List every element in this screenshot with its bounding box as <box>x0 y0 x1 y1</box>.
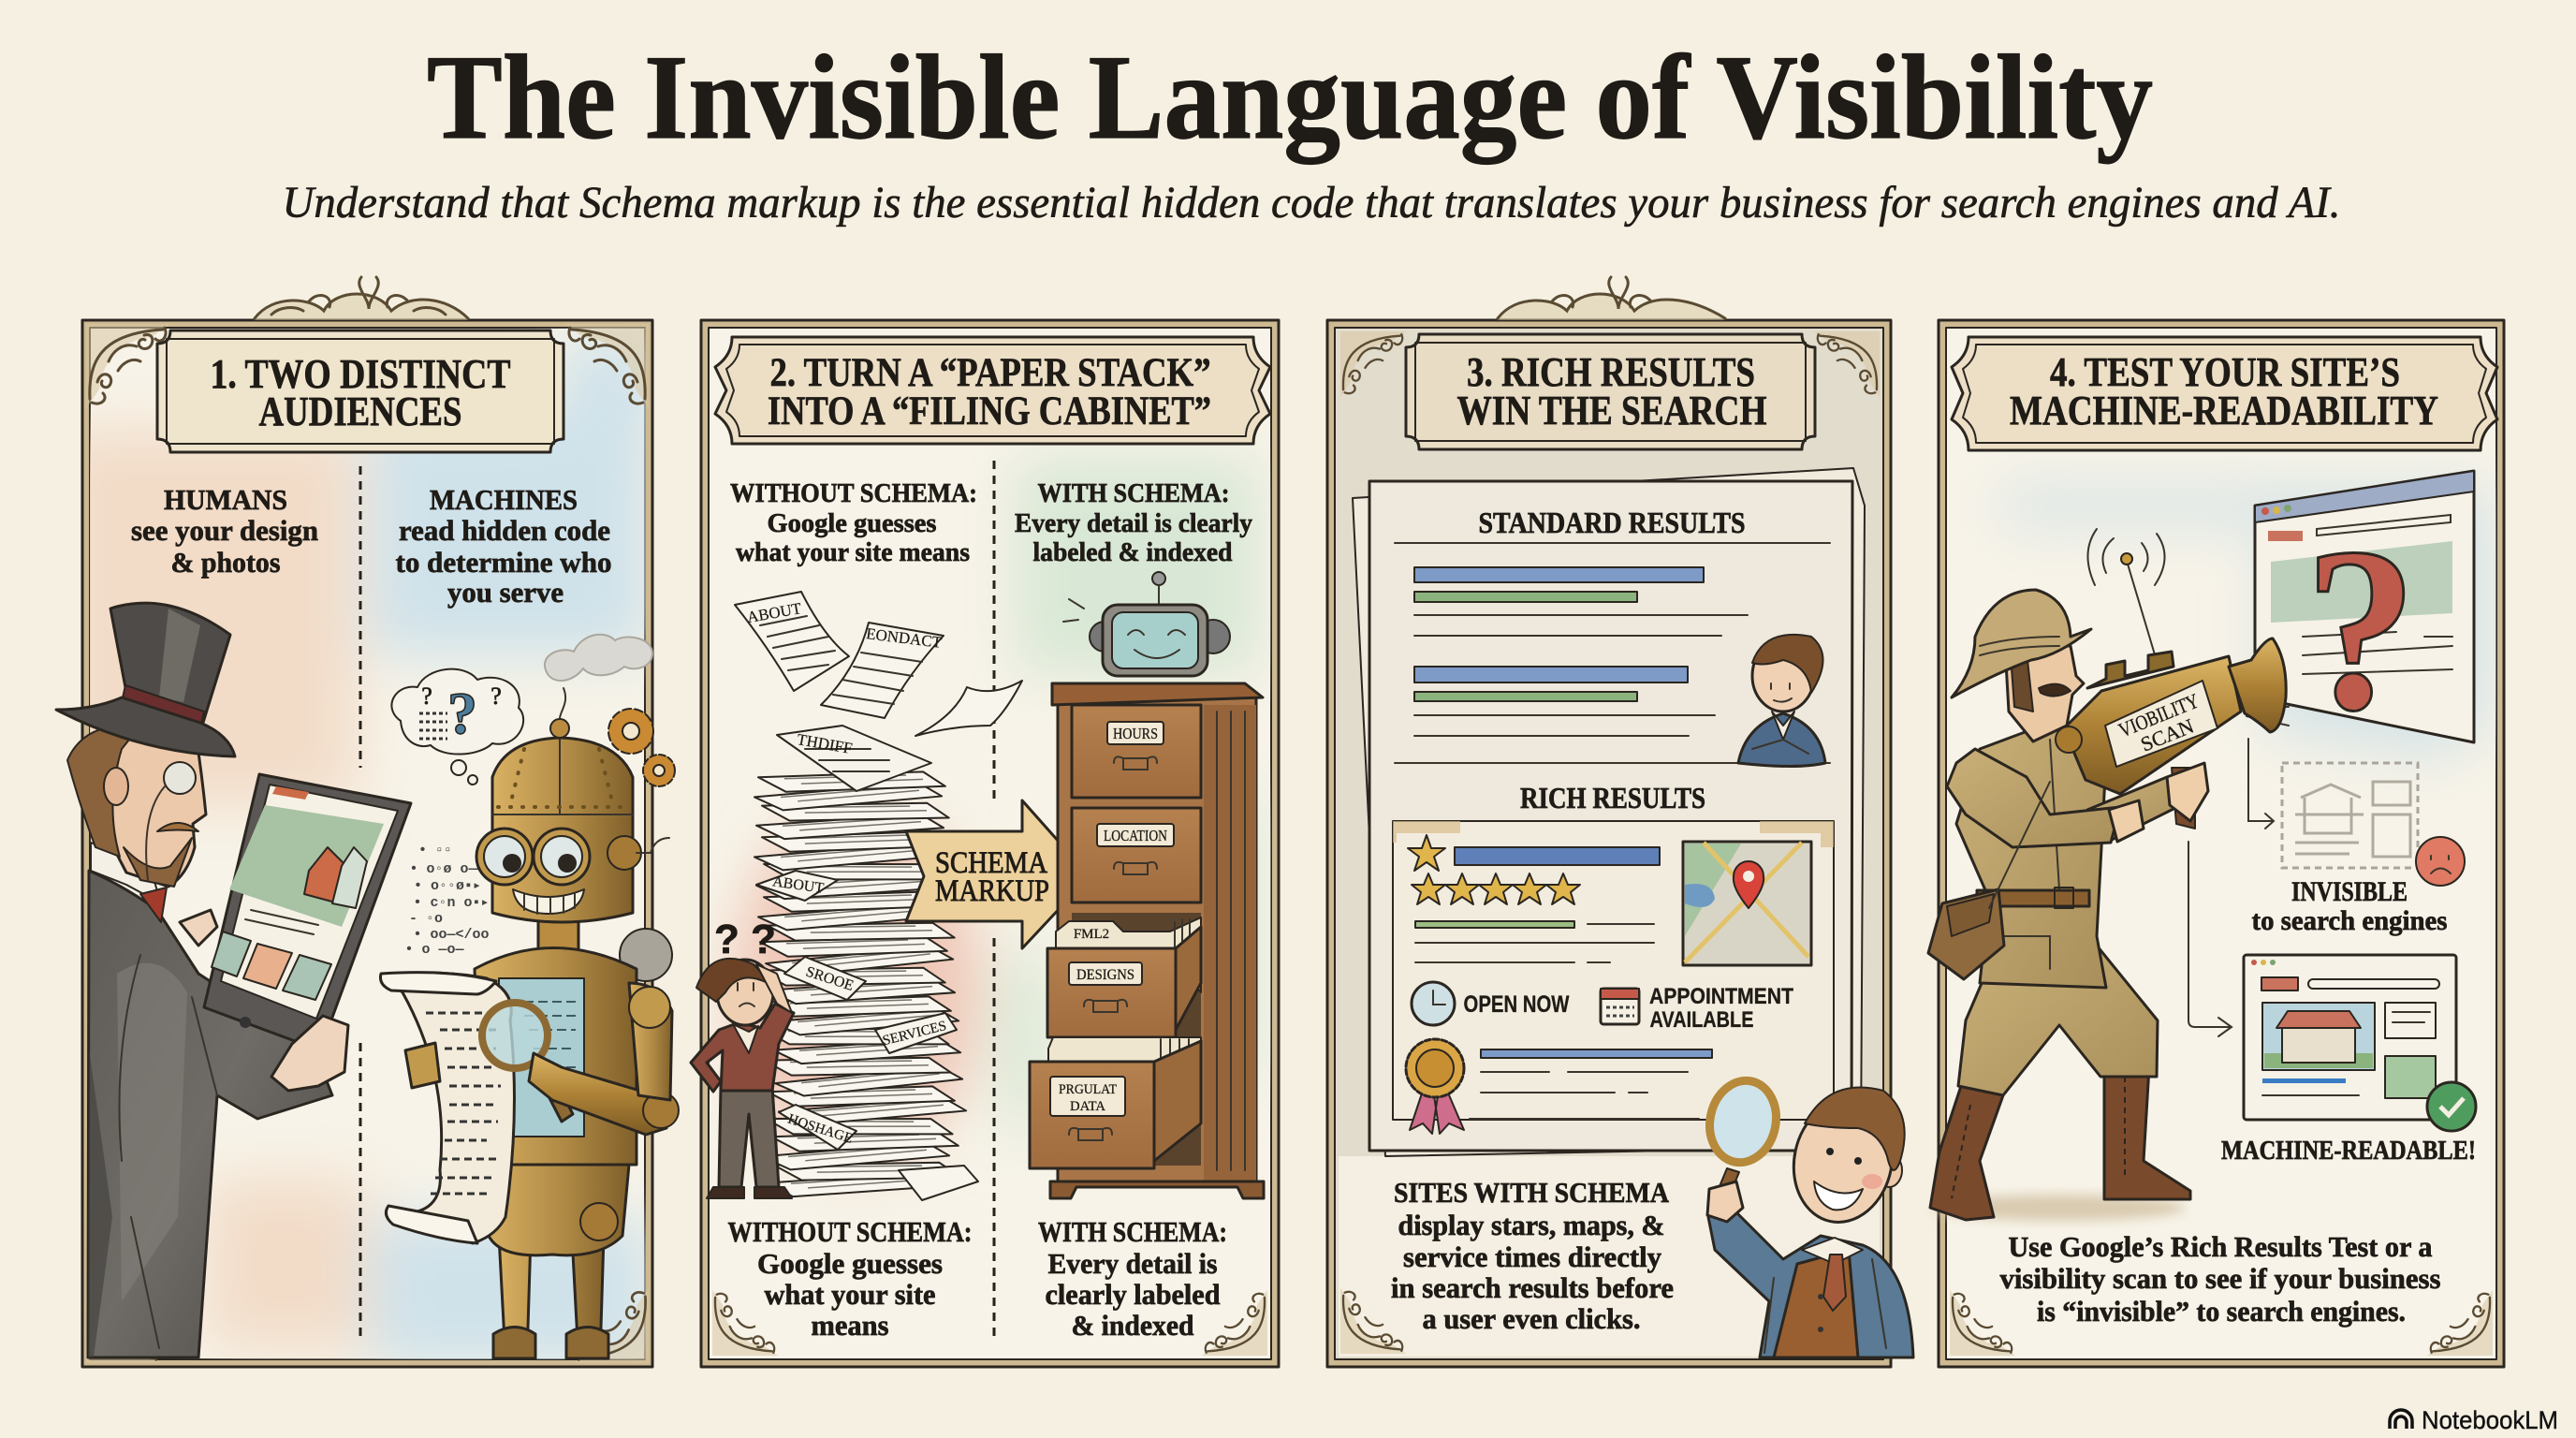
star rating <box>1408 835 1580 904</box>
open drawer: designs <box>1047 917 1201 1037</box>
heading plaque: INTO A “FILING CABINET” <box>768 389 1211 433</box>
panel: two distinct audiences <box>56 277 679 1367</box>
text: machines <box>395 483 612 609</box>
text: machines: you serve <box>447 576 564 609</box>
illustration: explorer with scanner <box>1928 529 2286 1221</box>
code glyphs: • oo—</oo <box>413 927 490 943</box>
text: invisible: to search engines <box>2252 905 2447 936</box>
text: machines: to determine who <box>395 546 612 579</box>
icon: check badge <box>2427 1082 2476 1131</box>
heading plaque <box>157 330 564 452</box>
stack labels: SERVICES <box>881 1019 948 1049</box>
text: sites with schema: in search results before <box>1391 1271 1674 1304</box>
scroll <box>380 973 514 1243</box>
subtitle: Understand that Schema markup is the essential hidden code that translates your business for search engines and AI. <box>283 178 2340 227</box>
text: with schema (top): labeled & indexed <box>1033 537 1232 567</box>
icon: thought bubble: ? <box>447 680 477 746</box>
arm <box>1947 749 2120 847</box>
drawer: hours <box>1072 705 1201 798</box>
code glyphs: • c◦n o▪▸ <box>413 895 490 911</box>
results sheets: RICH RESULTS <box>1520 781 1705 814</box>
illustration: man with magnifying glass <box>1703 1075 1913 1357</box>
icon: clock <box>1412 982 1455 1025</box>
icon: machine readable browser <box>2244 955 2456 1120</box>
text: with schema (bottom): Every detail is <box>1048 1247 1217 1280</box>
text: humans: see your design <box>131 514 318 547</box>
heading plaque: MACHINE-READABILITY <box>2010 388 2438 433</box>
text: machines: MACHINES <box>430 483 578 516</box>
head <box>2005 646 2084 741</box>
text: with schema (bottom) <box>1038 1215 1227 1342</box>
text: sites with schema <box>1391 1176 1674 1335</box>
illustration: tall paper stack: THDIFF <box>796 730 854 757</box>
open drawer: data <box>1030 1037 1201 1168</box>
heading plaque <box>715 337 1270 444</box>
icon: award medal <box>1406 1039 1464 1134</box>
rich result card: APPOINTMENT <box>1649 984 1793 1009</box>
code glyphs: • o◦◦ø▪▸ <box>414 878 481 894</box>
smoke cloud <box>545 635 652 681</box>
results sheets <box>1353 468 1865 1156</box>
rich result card: AVAILABLE <box>1649 1007 1754 1033</box>
text: closing instructions: is “invisible” to search engines. <box>2037 1295 2406 1328</box>
scanner: VIOBILITY <box>2115 689 2203 741</box>
scanner <box>2056 529 2286 829</box>
illustration: brass robot with scroll <box>380 635 679 1358</box>
code glyphs: • o —o— <box>404 942 465 958</box>
scanner: SCAN <box>2137 713 2197 756</box>
boots <box>1930 1086 2003 1220</box>
text: without schema (bottom): what your site <box>764 1278 936 1311</box>
text: without schema (bottom): means <box>811 1309 889 1342</box>
text: humans: & photos <box>170 546 281 579</box>
text: without schema (top): Google guesses <box>768 508 936 538</box>
heading plaque: WIN THE SEARCH <box>1456 388 1767 433</box>
drawer: location: LOCATION <box>1104 827 1167 844</box>
icon: faded invisible site <box>2282 763 2418 868</box>
stack labels: ABOUT <box>771 873 825 897</box>
text: with schema (top): Every detail is clearly <box>1015 508 1252 538</box>
stack labels: HOSHAGE <box>786 1112 855 1147</box>
flying sheet: about: ABOUT <box>746 599 803 626</box>
second sleeve <box>2087 777 2181 843</box>
heading plaque: 4. TEST YOUR SITE’S <box>2050 349 2400 395</box>
stack labels <box>756 871 978 1200</box>
divider <box>359 466 361 1337</box>
text: without schema (top): what your site means <box>736 537 970 567</box>
magnifier <box>482 1003 573 1122</box>
flying sheet: about <box>735 592 849 691</box>
icon: tablet <box>204 774 411 1050</box>
icon: browser with question mark <box>2228 471 2474 759</box>
trousers <box>1958 946 2158 1095</box>
text: machine-readable: MACHINE-READABLE! <box>2221 1137 2476 1166</box>
icon: browser with question mark: ? <box>2305 500 2417 759</box>
text: sites with schema: SITES WITH SCHEMA <box>1394 1176 1670 1209</box>
text: humans <box>131 483 318 579</box>
illustration: small businessman <box>1738 635 1825 766</box>
icon: thought bubble: ? <box>421 682 432 710</box>
flying sheet: contact: EONDACT <box>865 624 944 652</box>
pith helmet <box>1952 590 2091 697</box>
illustration: confused man: ? ? <box>714 917 776 962</box>
panel: paper stack to filing cabinet <box>691 320 1279 1367</box>
title: The Invisible Language of Visibility <box>427 30 2153 165</box>
open drawer: data: PRGULAT <box>1059 1082 1117 1097</box>
stack labels: SROOE <box>804 964 856 994</box>
text: sites with schema: service times directly <box>1403 1240 1661 1273</box>
open drawer: designs: DESIGNS <box>1076 967 1134 983</box>
text: without schema (top) <box>730 478 977 567</box>
panel: rich results win the search <box>1327 277 1913 1367</box>
heading plaque <box>1952 337 2497 450</box>
arrow: schema markup: MARKUP <box>935 874 1049 908</box>
icon: calendar <box>1601 989 1639 1024</box>
code glyphs: - ◦o <box>409 911 443 927</box>
text: machines: read hidden code <box>399 514 610 547</box>
text: closing instructions: Use Google’s Rich Results Test or a <box>2009 1230 2433 1263</box>
text: closing instructions <box>1999 1230 2441 1328</box>
illustration: filing cabinet <box>1030 572 1264 1198</box>
arrow: schema markup <box>906 800 1090 948</box>
heading plaque: 1. TWO DISTINCT <box>210 351 511 397</box>
watermark: NotebookLM: NotebookLM <box>2422 1406 2558 1434</box>
text: invisible <box>2252 876 2447 936</box>
heading plaque: 2. TURN A “PAPER STACK” <box>769 351 1211 395</box>
panel: test machine readability <box>1928 320 2504 1367</box>
icon: smiling robot <box>1063 572 1230 676</box>
text: sites with schema: a user even clicks. <box>1423 1302 1640 1335</box>
icon: thought bubble: ? <box>490 682 502 710</box>
icon: map <box>1683 842 1811 965</box>
icon: thought bubble <box>391 669 523 785</box>
text: without schema (top): WITHOUT SCHEMA: <box>730 478 977 508</box>
text: sites with schema: display stars, maps, & <box>1398 1209 1664 1241</box>
top sheet <box>777 726 931 791</box>
standard results: STANDARD RESULTS <box>1479 506 1745 539</box>
drawer: location <box>1072 808 1201 902</box>
text: with schema (bottom): & indexed <box>1071 1309 1194 1342</box>
illustration: confused man <box>691 917 794 1198</box>
heading plaque: 3. RICH RESULTS <box>1467 349 1755 395</box>
divider <box>992 461 996 1340</box>
code glyphs: • ▫▫ <box>418 843 452 858</box>
rich result card: OPEN NOW <box>1464 991 1570 1018</box>
text: without schema (bottom): WITHOUT SCHEMA: <box>728 1215 972 1248</box>
heading plaque: AUDIENCES <box>258 389 462 434</box>
code glyphs <box>404 843 490 958</box>
illustration: tall paper stack <box>735 592 1022 1200</box>
icon: gears <box>608 709 675 786</box>
text: without schema (bottom): Google guesses <box>757 1247 943 1280</box>
jacket <box>1956 723 2106 988</box>
drawer: hours: HOURS <box>1113 725 1158 742</box>
code glyphs: • o◦ø o—— <box>409 861 487 877</box>
text: with schema (top) <box>1015 478 1252 567</box>
illustration: gentleman with top hat <box>56 603 411 1357</box>
text: without schema (bottom) <box>728 1215 972 1342</box>
text: with schema (top): WITH SCHEMA: <box>1037 478 1230 508</box>
text: invisible: INVISIBLE <box>2291 876 2408 907</box>
text: humans: HUMANS <box>164 483 287 516</box>
rich result card <box>1393 821 1834 1134</box>
text: closing instructions: visibility scan to see if your business <box>1999 1262 2441 1295</box>
open drawer: data: DATA <box>1070 1099 1105 1114</box>
arrow: schema markup: SCHEMA <box>935 846 1047 880</box>
standard results <box>1395 506 1830 763</box>
flying sheet: contact <box>821 623 944 718</box>
icon: sad face <box>2416 837 2465 886</box>
open drawer: designs: FML2 <box>1074 927 1109 942</box>
heading plaque <box>1406 334 1815 449</box>
satchel <box>1928 889 2004 979</box>
text: with schema (bottom): WITH SCHEMA: <box>1038 1215 1227 1248</box>
text: with schema (bottom): clearly labeled <box>1045 1278 1221 1311</box>
